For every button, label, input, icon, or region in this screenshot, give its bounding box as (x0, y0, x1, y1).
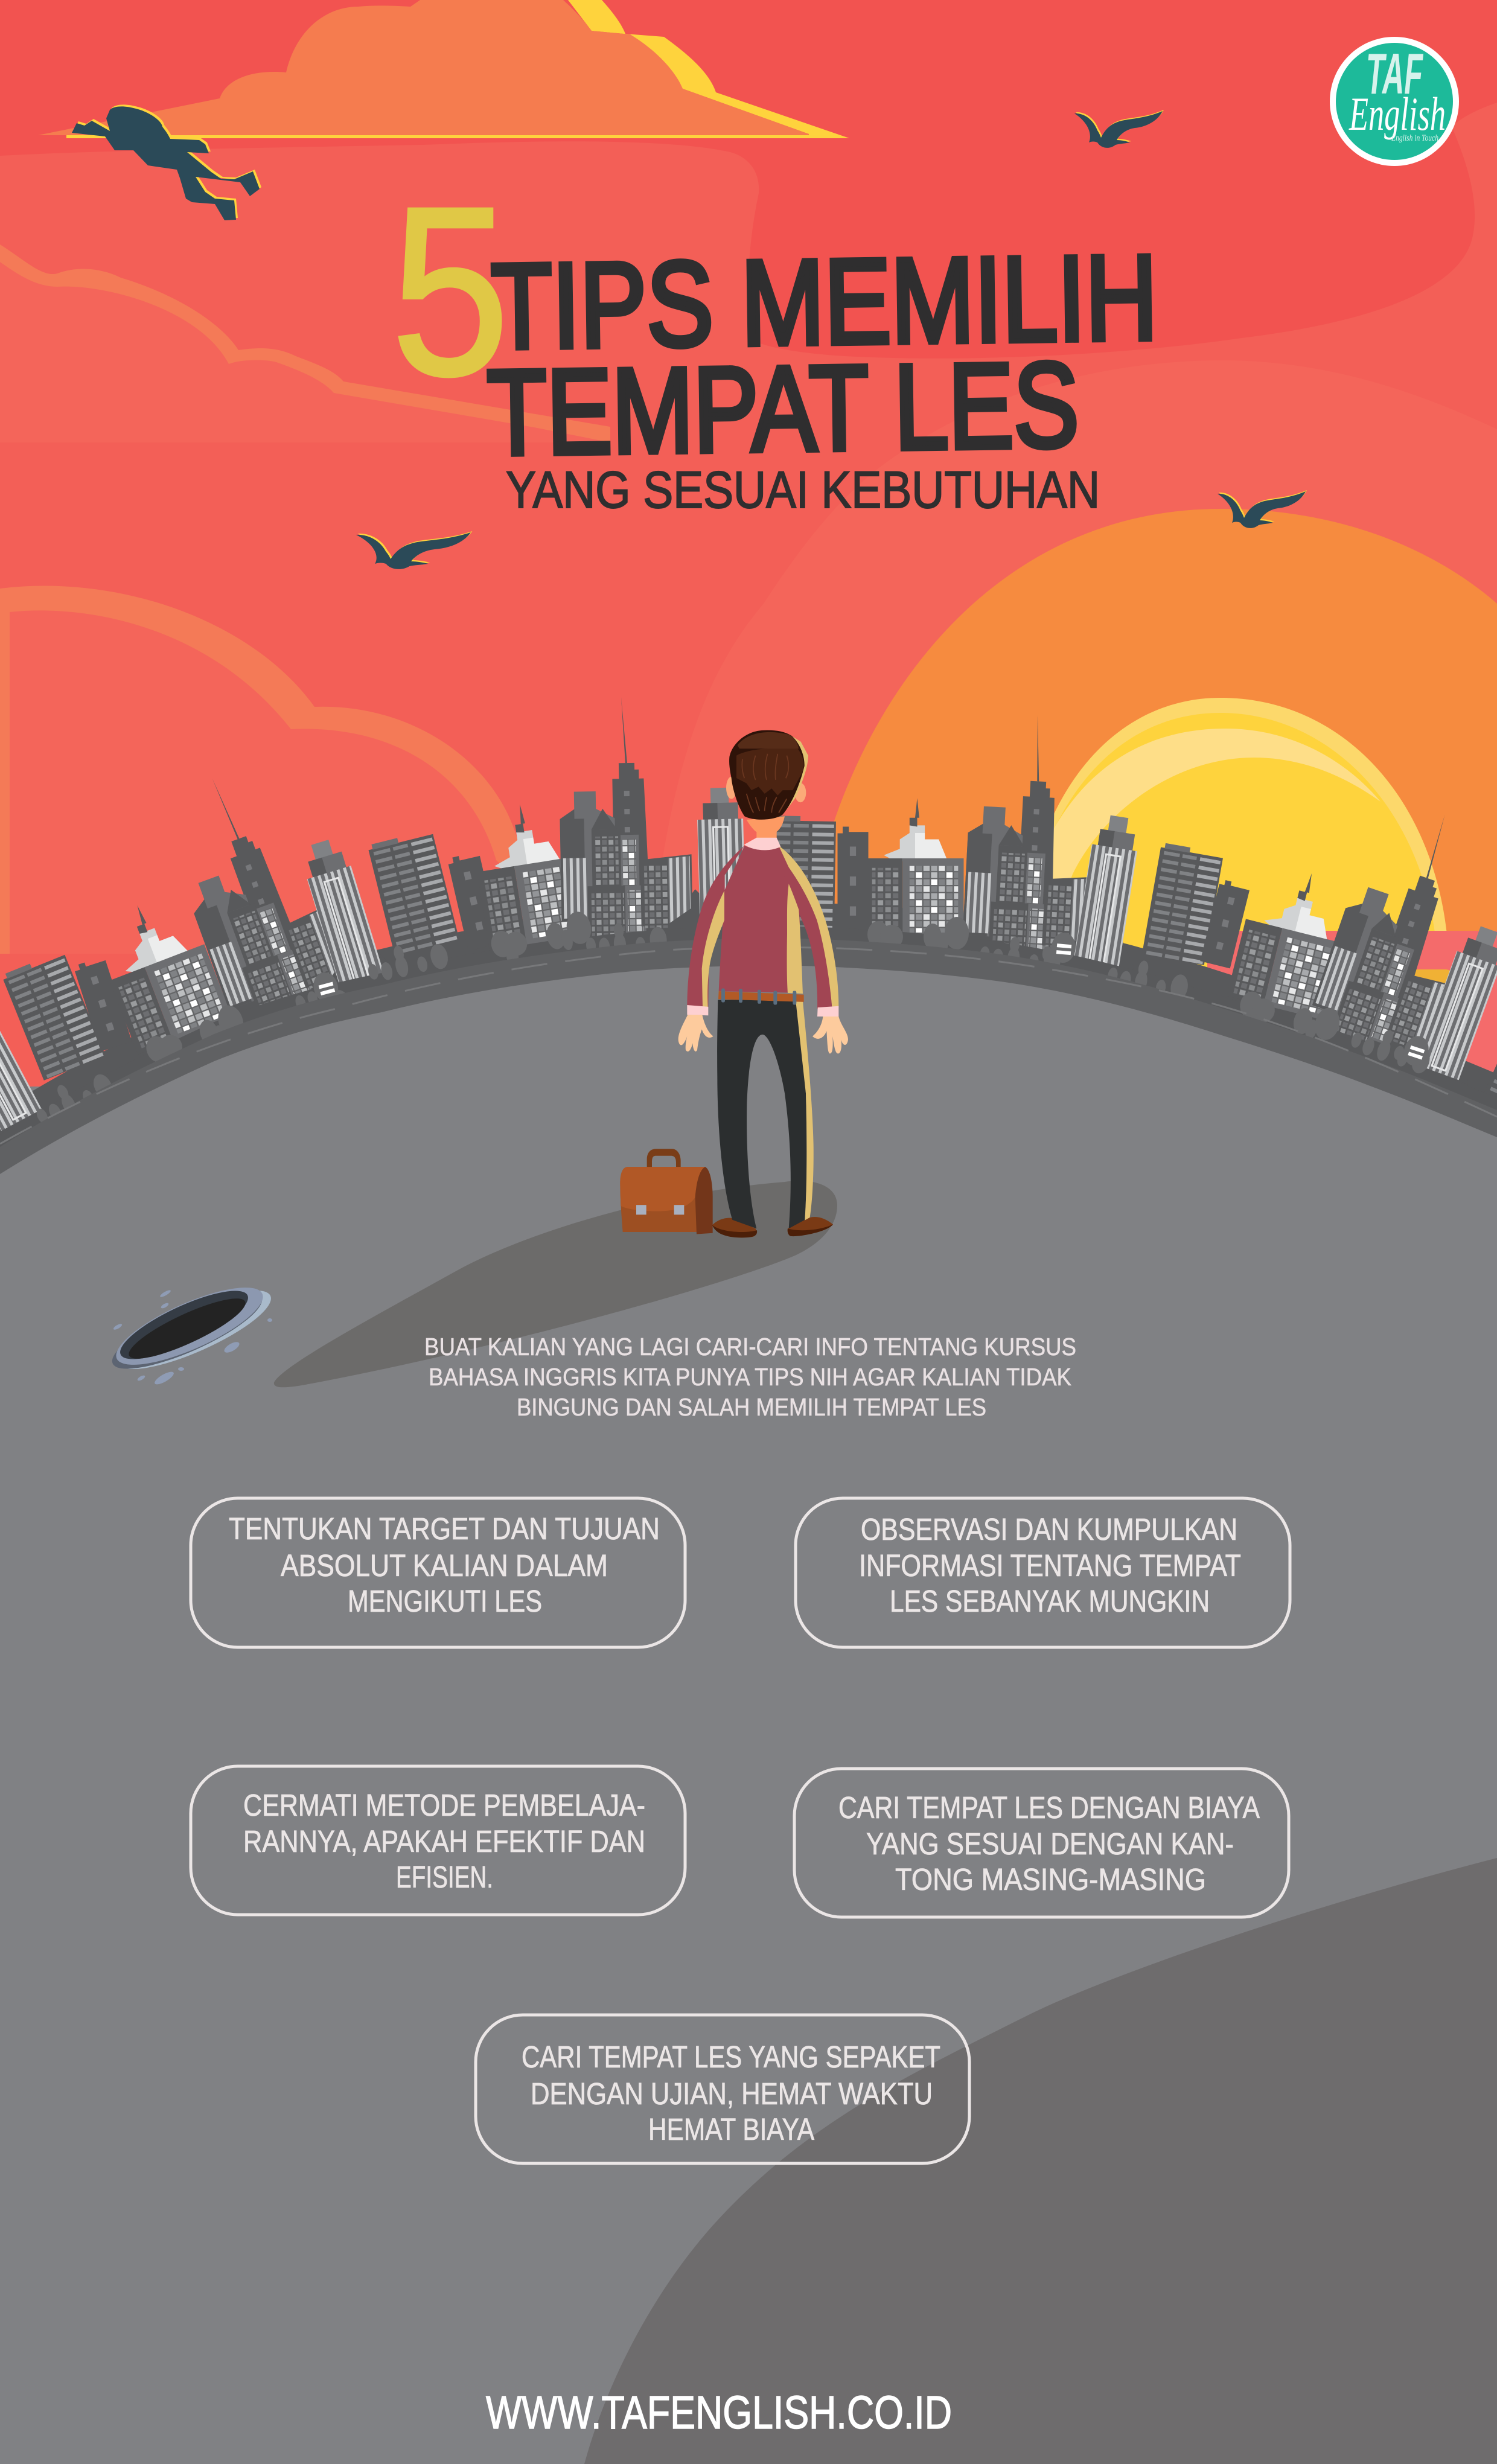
shoes (712, 1217, 833, 1237)
title: main heading: TIPS MEMILIH (490, 230, 1158, 374)
dark backing behind the skyline (0, 902, 1497, 1265)
collar and cuffs (687, 838, 838, 1017)
man standing with briefcase (620, 730, 848, 1237)
left sleeve (687, 846, 744, 1007)
title: main heading (485, 230, 1160, 480)
tip box 3: CERMATI METODE PEMBELAJA- (243, 1788, 645, 1822)
tip box 1: MENGIKUTI LES (348, 1584, 542, 1618)
sweater body (719, 846, 802, 993)
left middle cloud (0, 244, 610, 442)
tip box 1: TENTUKAN TARGET DAN TUJUAN (229, 1511, 660, 1546)
trouser stripe (796, 1001, 814, 1220)
long shadow of the man (274, 1181, 837, 1387)
road (0, 939, 1497, 1301)
website url: WWW.TAFENGLISH.CO.ID (486, 2387, 952, 2439)
bird centre left (356, 531, 472, 569)
hands (678, 1015, 848, 1053)
title: subheading: YANG SESUAI KEBUTUHAN (506, 461, 1100, 519)
darker hill bottom right (584, 1858, 1497, 2464)
intro paragraph: BAHASA INGGRIS KITA PUNYA TIPS NIH AGAR KALIAN TIDAK (429, 1363, 1071, 1391)
trousers (717, 1000, 806, 1228)
sky background (0, 0, 1497, 1087)
trees along the road (29, 910, 1435, 1129)
title: main heading: TEMPAT LES (487, 337, 1080, 480)
neck (747, 816, 785, 842)
bird top right (1074, 110, 1164, 148)
tip box 2: INFORMASI TENTANG TEMPAT (859, 1548, 1241, 1583)
block of centre left buildings (368, 695, 746, 956)
logo: TAF English: English in Touch (1391, 133, 1438, 143)
tip box 2 (796, 1498, 1290, 1647)
grey ground (0, 966, 1497, 2464)
tip box 1 (191, 1498, 685, 1647)
belt with loops (718, 988, 804, 1004)
tip box 4 (794, 1769, 1289, 1917)
briefcase (620, 1149, 713, 1234)
logo: TAF English: English (1349, 88, 1446, 140)
pink band and orange pill at horizon (1207, 931, 1497, 1087)
intro paragraph (424, 1333, 1076, 1421)
tip box 2: OBSERVASI DAN KUMPULKAN (861, 1512, 1237, 1546)
tip box 5: HEMAT BIAYA (648, 2112, 814, 2146)
manhole (104, 1273, 279, 1387)
lighter hill behind sun (663, 360, 1497, 1026)
tip box 1: ABSOLUT KALIAN DALAM (281, 1548, 608, 1583)
block of centre right buildings (768, 712, 1147, 971)
tip box 4: YANG SESUAI DENGAN KAN- (866, 1827, 1234, 1861)
intro paragraph: BUAT KALIAN YANG LAGI CARI-CARI INFO TENTANG KURSUS (424, 1333, 1076, 1361)
block of far left buildings (0, 741, 400, 1131)
tip box 4: CARI TEMPAT LES DENGAN BIAYA (838, 1790, 1260, 1825)
intro paragraph: BINGUNG DAN SALAH MEMILIH TEMPAT LES (517, 1393, 986, 1421)
block of far right buildings (1142, 794, 1497, 1124)
skydiver silhouette (72, 104, 261, 220)
tip box 3: EFISIEN. (396, 1860, 493, 1894)
top orange cloud (38, 0, 849, 138)
title: big number 5: 5 (391, 158, 509, 426)
orange sun halo (803, 509, 1497, 978)
tip box 3 (191, 1766, 685, 1915)
ears (726, 777, 806, 802)
dark upper sky blob (0, 0, 1497, 359)
yellow sun (1020, 698, 1449, 978)
ridge under the buildings (0, 927, 1497, 1289)
city skyline (0, 695, 1497, 1131)
lower left cloud (0, 586, 543, 954)
yellow side panel (787, 884, 803, 994)
tip box 4: TONG MASING-MASING (895, 1862, 1206, 1897)
logo: TAF English (1330, 37, 1459, 166)
tip box 3: RANNYA, APAKAH EFEKTIF DAN (243, 1824, 645, 1859)
hair (729, 730, 808, 820)
tip box 5: CARI TEMPAT LES YANG SEPAKET (522, 2040, 940, 2074)
right sleeve with yellow edge (779, 846, 838, 1007)
bird right (1218, 490, 1307, 528)
tip box 5: DENGAN UJIAN, HEMAT WAKTU (531, 2076, 933, 2111)
logo: TAF English: TAF (1366, 42, 1423, 106)
tip box 2: LES SEBANYAK MUNGKIN (890, 1584, 1210, 1618)
tip box 5 (476, 2015, 969, 2163)
